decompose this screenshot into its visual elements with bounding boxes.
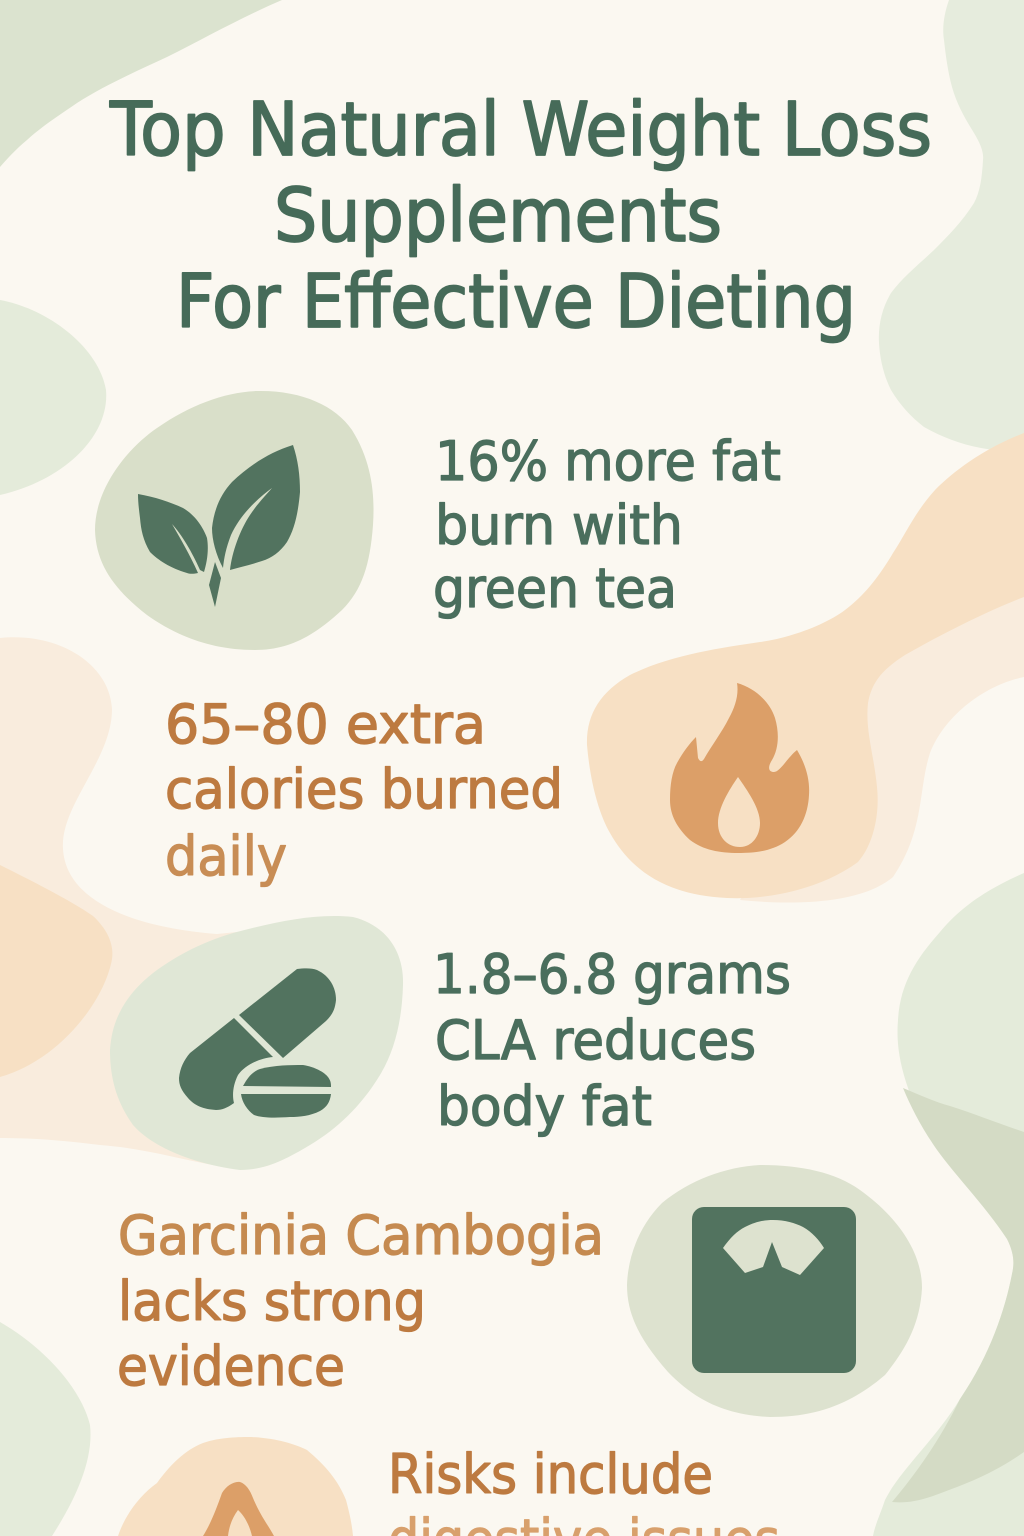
text: green tea stat: 16% more fat	[435, 430, 781, 493]
text: calories stat	[165, 693, 563, 888]
title: For Effective Dieting	[176, 259, 856, 345]
text: CLA stat: body fat	[437, 1075, 652, 1138]
text: risks note	[388, 1443, 780, 1536]
icon: pill and tablet	[110, 916, 403, 1170]
title: Top Natural Weight Loss	[109, 87, 932, 173]
text: garcinia note: lacks strong	[118, 1270, 426, 1333]
text: calories stat: daily	[165, 825, 287, 888]
icon: tea leaves	[95, 391, 374, 650]
item 4: Garcinia	[117, 1165, 922, 1417]
text: CLA stat: CLA reduces	[435, 1009, 756, 1072]
text: risks note: Risks include	[388, 1443, 713, 1506]
icon: risk blob and drop (cropped)	[118, 1437, 353, 1536]
text: CLA stat	[433, 943, 791, 1138]
title: Supplements	[274, 173, 722, 259]
text: garcinia note	[117, 1204, 604, 1398]
title	[109, 87, 932, 345]
item 5: risks	[118, 1437, 780, 1536]
text: garcinia note: evidence	[117, 1335, 345, 1398]
icon: scale	[627, 1165, 922, 1417]
text: green tea stat: green tea	[433, 557, 677, 620]
icon: flame	[670, 683, 809, 853]
item 1: green tea	[95, 391, 781, 650]
text: garcinia note: Garcinia Cambogia	[118, 1204, 604, 1267]
text: calories stat: 65–80 extra	[165, 693, 486, 756]
item 2: extra calories	[165, 683, 809, 888]
text: CLA stat: 1.8–6.8 grams	[433, 943, 791, 1006]
text: green tea stat	[433, 430, 781, 620]
text: green tea stat: burn with	[435, 494, 683, 557]
text: calories stat: calories burned	[165, 758, 563, 821]
item 3: CLA	[110, 916, 791, 1170]
